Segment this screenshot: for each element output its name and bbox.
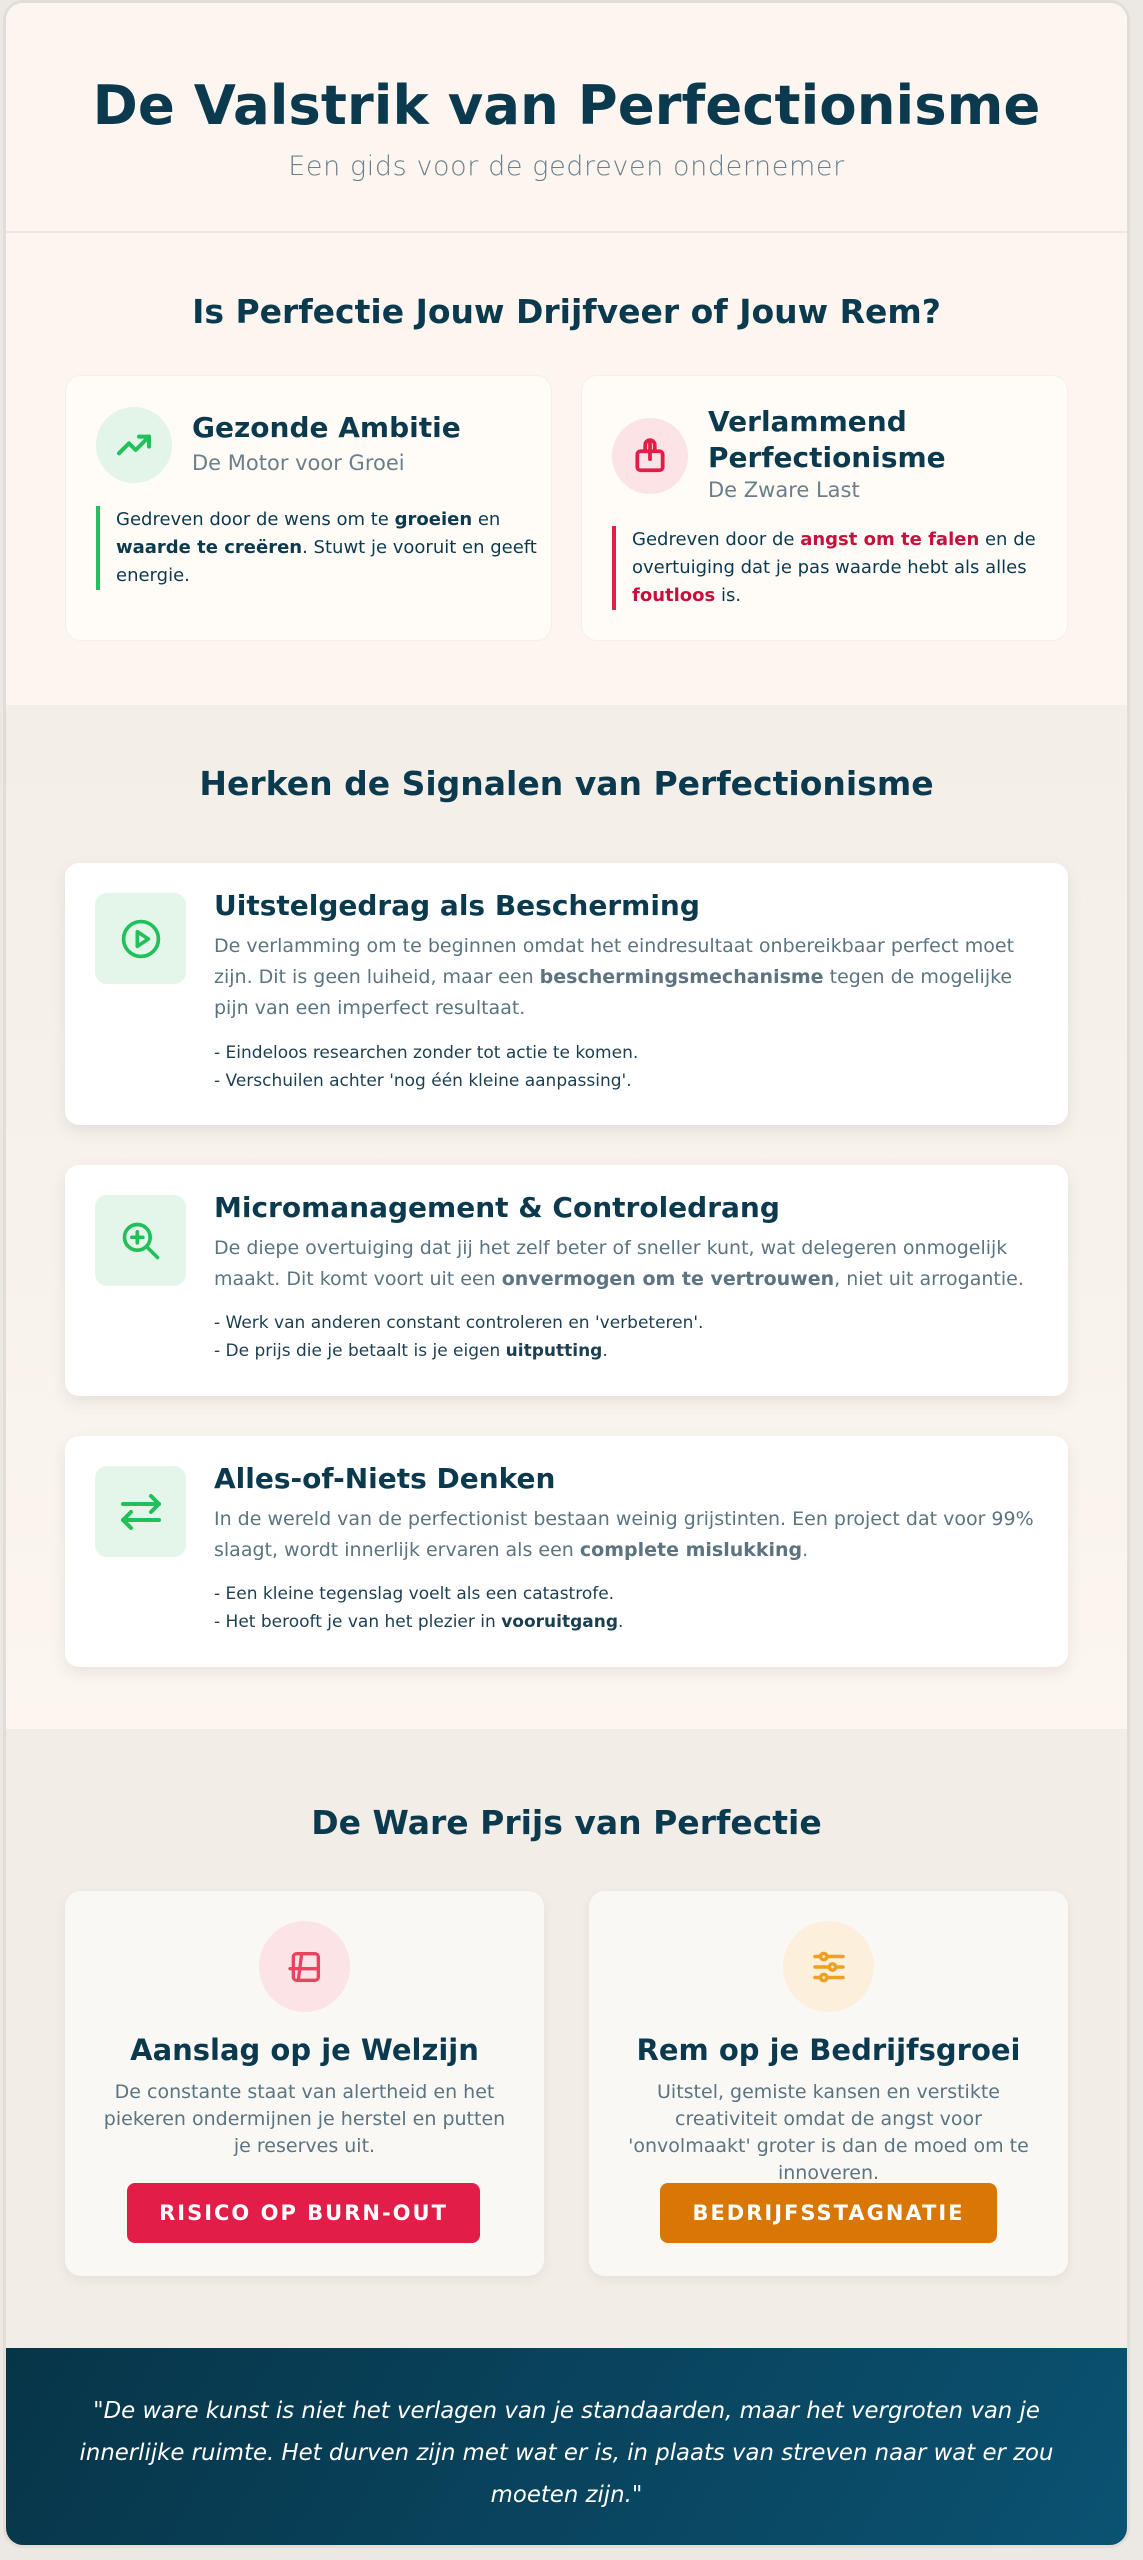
card title: Gezonde Ambitie [192,411,461,444]
bullets: - Eindeloos researchen zonder tot actie te komen. [214,1043,638,1063]
bullets: - Het berooft je van het plezier in vooruitgang. [214,1612,623,1632]
bullets: - Verschuilen achter 'nog één kleine aanpassing'. [214,1071,632,1091]
footer quote [6,2348,1127,2551]
signal card: all or nothing [65,1436,1068,1667]
bullets [214,1313,703,1361]
icon: arrows [95,1466,186,1557]
badge [660,2183,997,2243]
signal card: procrastination [65,863,1068,1125]
description: Uitstel, gemiste kansen en verstikte creativiteit omdat de angst voor 'onvolmaakt' groter is dan de moed om te innoveren. [628,2081,1029,2184]
badge: RISICO OP BURN-OUT [159,2201,448,2225]
icon: zoom in [95,1195,186,1286]
signal card: micromanagement [65,1165,1068,1396]
bullets: - Werk van anderen constant controleren en 'verbeteren'. [214,1313,703,1333]
quote: Gedreven door de wens om te groeien en waarde te creëren. Stuwt je vooruit en geeft energie. [116,509,537,586]
heading: Herken de Signalen van Perfectionisme [199,764,934,803]
card title: Verlammend [708,405,907,438]
description: De constante staat van alertheid en het piekeren ondermijnen je herstel en putten je reserves uit. [104,2081,505,2157]
title: Uitstelgedrag als Bescherming [214,889,700,922]
title: De Valstrik van Perfectionisme [93,73,1040,137]
bullets [214,1584,623,1632]
description: De diepe overtuiging dat jij het zelf beter of sneller kunt, wat delegeren onmogelijk maakt. Dit komt voort uit een onvermogen om te vertrouwen, niet uit arrogantie. [214,1237,1024,1290]
price card: growth [589,1891,1068,2276]
quote: Gedreven door de angst om te falen en de overtuiging dat je pas waarde hebt als alles foutloos is. [632,529,1036,606]
badge [127,2183,480,2243]
footer quote: "De ware kunst is niet het verlagen van je standaarden, maar het vergroten van je innerlijke ruimte. Het durven zijn met wat er is, in plaats van streven naar wat er zou moeten zijn." [80,2398,1053,2508]
section: true price [6,1729,1127,2350]
price card: wellbeing [65,1891,544,2276]
heading: De Ware Prijs van Perfectie [311,1803,822,1842]
card title [708,405,946,474]
icon: lock bag [612,418,688,494]
section: drive or brake [6,235,1127,705]
badge: BEDRIJFSSTAGNATIE [692,2201,965,2225]
title: Aanslag op je Welzijn [130,2033,479,2067]
heading: Is Perfectie Jouw Drijfveer of Jouw Rem? [192,292,941,331]
card subtitle: De Motor voor Groei [192,451,405,475]
description: In de wereld van de perfectionist bestaan weinig grijstinten. Een project dat voor 99% slaagt, wordt innerlijk ervaren als een complete mislukking. [214,1508,1034,1561]
card: paralyzing perfectionism [581,375,1068,641]
bullets: - Een kleine tegenslag voelt als een catastrofe. [214,1584,614,1604]
title: Alles-of-Niets Denken [214,1462,555,1495]
bullets: - De prijs die je betaalt is je eigen uitputting. [214,1341,608,1361]
icon: play [95,893,186,984]
bullets [214,1043,638,1091]
card subtitle: De Zware Last [708,478,860,502]
card title: Perfectionisme [708,441,946,474]
icon: sliders [783,1921,874,2012]
icon: wellbeing [259,1921,350,2012]
card: healthy ambition [65,375,552,641]
title: Micromanagement & Controledrang [214,1191,780,1224]
description: De verlamming om te beginnen omdat het eindresultaat onbereikbaar perfect moet zijn. Dit is geen luiheid, maar een beschermingsmechanisme tegen de mogelijke pijn van een imperfect resultaat. [214,935,1014,1019]
title: Rem op je Bedrijfsgroei [636,2033,1020,2067]
section: signals [6,705,1127,1729]
subtitle: Een gids voor de gedreven ondernemer [288,151,845,182]
icon: trending up [96,407,172,483]
header [6,3,1127,233]
